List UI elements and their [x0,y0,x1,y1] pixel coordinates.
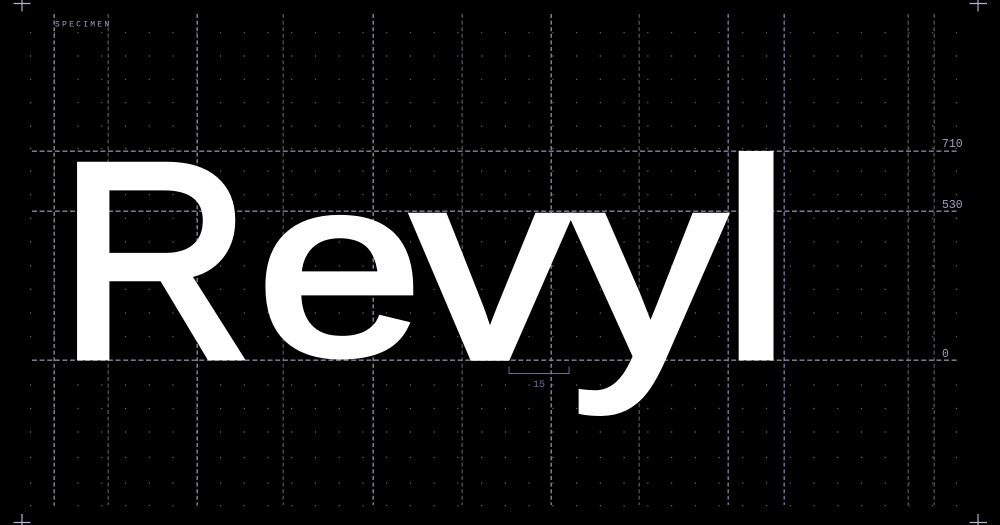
wordmark: Revyl [59,105,789,416]
stem width bracket: 15 [533,380,545,391]
label: specimen: SPECIMEN [55,20,111,30]
metric label: 0: 0 [942,348,949,361]
wordmark: Revyl: v [413,117,569,414]
stem width bracket [509,366,569,391]
wordmark: Revyl: y [573,117,724,415]
wordmark: Revyl: R [59,105,251,416]
metric label: 710: 710 [942,138,963,151]
wordmark: Revyl: e [257,127,422,407]
metric label: 530: 530 [942,199,963,212]
wordmark: Revyl: l [723,106,789,416]
